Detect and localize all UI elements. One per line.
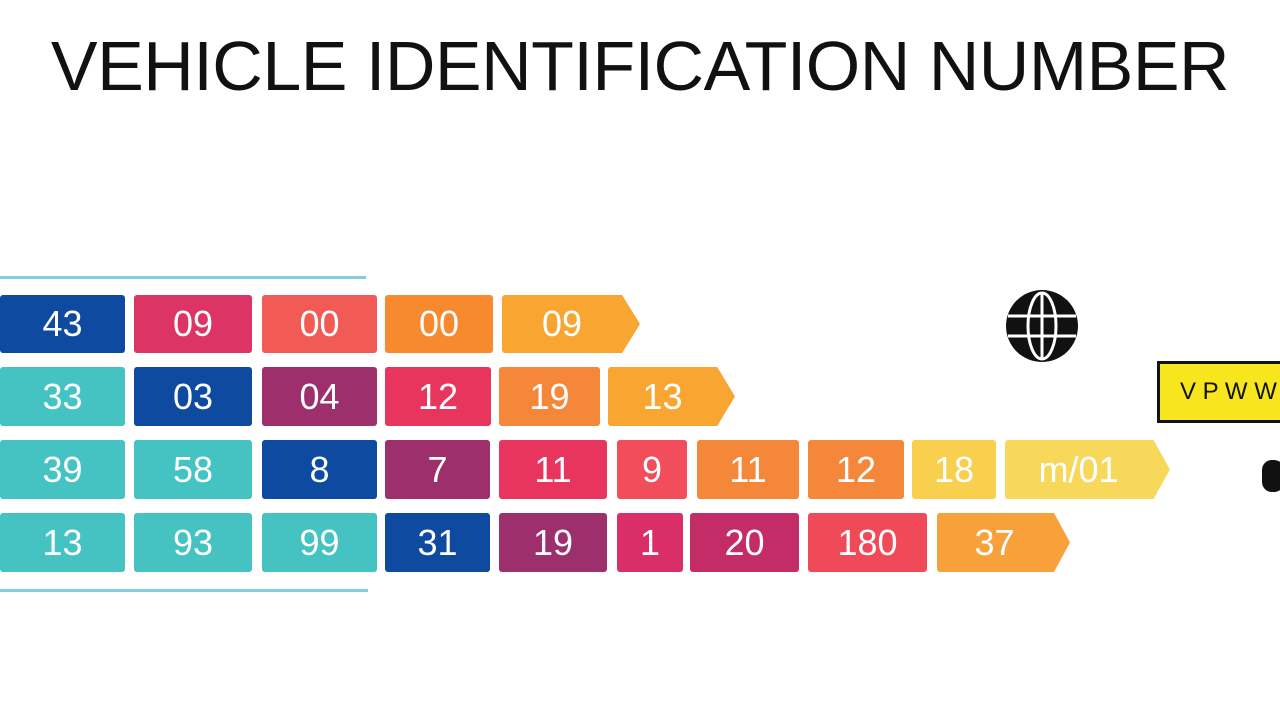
title: VEHICLE IDENTIFICATION NUMBER — [51, 27, 1229, 105]
row 2: 19 — [529, 376, 570, 416]
icon: globe — [1006, 290, 1078, 362]
row 4: 31 — [417, 522, 458, 562]
row 3: 9 — [642, 448, 662, 490]
row 3: 39 — [42, 448, 83, 490]
row 4: 1 — [640, 522, 660, 562]
row 1: 00 — [419, 303, 459, 344]
row 4: 180 — [837, 522, 898, 562]
icon: black mark — [1262, 460, 1280, 492]
row 1: 00 — [299, 303, 340, 344]
row 3: 18 — [934, 448, 974, 490]
row 2: 33 — [42, 376, 83, 416]
row 2 — [0, 367, 735, 426]
row 1: 43 — [42, 303, 83, 344]
callout: yellow label — [1157, 361, 1280, 423]
row 3: 8 — [309, 448, 330, 490]
row 1 — [0, 295, 640, 353]
row 4: 37 — [974, 522, 1015, 562]
row 4 — [0, 513, 1070, 572]
divider top — [0, 276, 366, 279]
callout: yellow label: V P W W — [1180, 378, 1277, 405]
row 2: 13 — [642, 376, 683, 416]
row 3: m/01 — [1038, 448, 1119, 490]
row 3: 11 — [534, 448, 572, 490]
row 3 — [0, 440, 1170, 499]
row 4: 99 — [299, 522, 340, 562]
row 1: 09 — [173, 303, 213, 344]
row 2: 04 — [299, 376, 340, 416]
row 4: 20 — [724, 522, 765, 562]
row 3: 11 — [729, 448, 767, 490]
row 3: 58 — [173, 448, 213, 490]
row 3: 7 — [427, 448, 448, 490]
row 2: 12 — [418, 376, 458, 416]
row 1: 09 — [542, 303, 582, 344]
divider bottom — [0, 589, 368, 592]
row 3: 12 — [836, 448, 876, 490]
row 4: 19 — [533, 522, 573, 562]
row 2: 03 — [173, 376, 213, 416]
row 4: 13 — [42, 522, 83, 562]
row 4: 93 — [173, 522, 213, 562]
